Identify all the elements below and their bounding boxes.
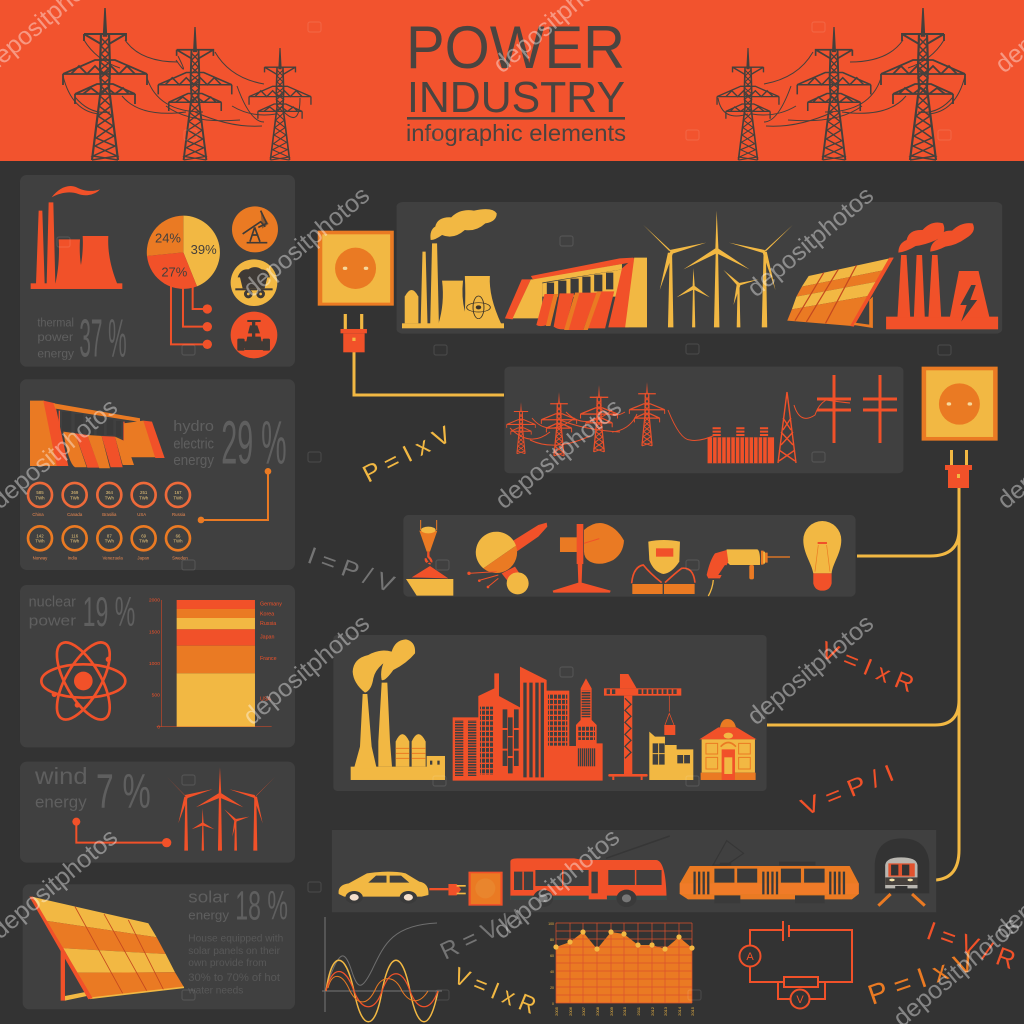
icon: wind turbines xyxy=(643,211,793,327)
label: hydro electric energy: electric xyxy=(173,437,214,453)
ring chart row two xyxy=(28,526,190,560)
label: thermal power energy: power xyxy=(37,330,73,344)
icon: nuclear plant xyxy=(402,209,504,328)
panel: hydro electric xyxy=(20,379,295,570)
connector xyxy=(198,468,271,523)
ring chart row one: 585 xyxy=(36,490,44,495)
label: thermal power energy xyxy=(37,316,74,361)
pie chart: 39% xyxy=(191,242,217,257)
icon: coal cart xyxy=(231,259,277,306)
solar description: solar panels on their xyxy=(188,946,281,957)
ring chart row one: 364 xyxy=(106,490,114,495)
label: thermal power energy: energy xyxy=(37,347,74,361)
depositphotos watermark: depositphotos xyxy=(238,609,375,731)
label: hydro electric energy: energy xyxy=(173,453,215,469)
chart: area chart: 0 xyxy=(552,1002,554,1006)
ring chart row one: TWh xyxy=(70,495,80,500)
panel: wind energy xyxy=(20,762,295,863)
chart: area chart: 2012 xyxy=(650,1006,655,1016)
ring chart row two: Norway xyxy=(33,555,48,560)
icon: thermal plant xyxy=(886,222,998,329)
icon: trolleybus xyxy=(510,836,670,907)
label: hydro electric energy xyxy=(173,419,215,469)
depositphotos watermark: depositphotos xyxy=(490,393,627,515)
diagram: circuit: A xyxy=(746,951,754,963)
stacked bar chart: Korea xyxy=(260,611,274,617)
chart: area chart: 2006 xyxy=(568,1006,573,1016)
ring chart row two: TWh xyxy=(105,539,114,544)
stacked bar chart: Russia xyxy=(260,621,276,627)
chart: area chart: 2005 xyxy=(554,1006,559,1016)
label: hydro electric energy: hydro xyxy=(173,419,214,435)
diagram: circuit xyxy=(740,921,852,1008)
icon: skyline xyxy=(453,667,603,781)
ring chart row one: 167 xyxy=(174,490,182,495)
chart: area chart: 2011 xyxy=(636,1006,641,1016)
label: solar energy: energy xyxy=(188,908,230,922)
ring chart row two: TWh xyxy=(173,539,183,544)
icon: crane hook with load xyxy=(406,520,453,596)
formula: P = I x V yellow: P = I x V xyxy=(358,421,455,488)
label: solar energy: solar xyxy=(188,888,229,907)
panel: hydro electric: 29 % xyxy=(221,408,287,477)
depositphotos watermark: depositphotos xyxy=(742,609,879,731)
ring chart row one: 369 xyxy=(71,490,79,495)
chart: area chart: 2008 xyxy=(595,1006,600,1016)
solar description: House equipped with xyxy=(188,934,283,945)
icon: atom xyxy=(41,635,125,727)
stacked bar chart: USA xyxy=(260,697,271,703)
ring chart row one: Canada xyxy=(67,512,83,517)
icon: transformer xyxy=(708,427,774,463)
stacked bar chart: 1000 xyxy=(149,661,160,667)
subtitle: infographic elements xyxy=(406,120,626,146)
title: INDUSTRY: INDUSTRY xyxy=(407,73,625,122)
socket one xyxy=(318,231,394,306)
ring chart row one: USA xyxy=(137,512,146,517)
chart: area chart: 2013 xyxy=(663,1006,668,1016)
pylons right xyxy=(717,8,965,160)
ring chart row two: 87 xyxy=(107,533,112,538)
icon: building under construction xyxy=(649,732,693,780)
ring chart row two: 66 xyxy=(176,533,181,538)
stacked bar chart xyxy=(149,598,282,730)
diagram: circuit: V xyxy=(796,994,804,1006)
ring chart row one xyxy=(28,483,190,517)
icon: dam xyxy=(30,401,165,468)
value: 18 %: 18 % xyxy=(235,882,288,928)
label: solar energy xyxy=(188,888,230,922)
chart: area chart: 80 xyxy=(550,938,554,942)
icon: light bulb xyxy=(803,521,841,591)
stacked bar chart: 500 xyxy=(152,693,160,699)
formula: V = P / I orange: V = P / I xyxy=(797,760,898,822)
ring chart row one: Russia xyxy=(172,512,186,517)
stacked bar chart: Germany xyxy=(260,602,282,608)
depositphotos watermark: depositphotos xyxy=(488,823,625,945)
ring chart row one: TWh xyxy=(105,495,114,500)
chart: area chart: 2014 xyxy=(677,1006,682,1016)
ring chart row two: Japan xyxy=(137,555,150,560)
panel: thermal power: 37 % xyxy=(79,310,127,369)
ring chart row two: Venezuela xyxy=(103,555,123,560)
header band xyxy=(0,0,1024,161)
pie connectors xyxy=(171,283,212,349)
label: nuclear power: nuclear xyxy=(29,595,76,611)
depositphotos watermark: depositphotos xyxy=(238,181,375,303)
connecting yellow wires xyxy=(354,352,959,880)
ring chart row one: TWh xyxy=(35,495,45,500)
chart: area chart: 60 xyxy=(550,954,554,958)
label: wind energy: energy xyxy=(35,792,87,811)
chart: area chart: 20 xyxy=(550,986,554,990)
panel: transport xyxy=(332,830,936,912)
label: wind energy xyxy=(34,763,88,811)
ring chart row two: India xyxy=(68,555,78,560)
panel: solar energy xyxy=(23,882,295,1009)
chart: area chart: 40 xyxy=(550,970,554,974)
icon: gas valve xyxy=(231,312,277,358)
icon: tram xyxy=(680,841,859,903)
formula: I = P / V gray: I = P / V xyxy=(304,542,398,598)
icon: transmission towers xyxy=(507,382,715,456)
chart: area chart: 2009 xyxy=(609,1006,614,1016)
connector xyxy=(72,818,171,847)
icon: tower crane xyxy=(604,674,681,780)
pie chart: 24% xyxy=(155,230,181,245)
icon: welder xyxy=(632,540,695,594)
chart: sine waves xyxy=(322,917,442,1022)
socket two xyxy=(922,367,998,441)
icon: thermal plant xyxy=(31,186,122,289)
panel: thermal power xyxy=(20,175,295,369)
icon: solar panel xyxy=(29,897,184,1001)
icon: city factory xyxy=(351,639,445,780)
ring chart row one: 251 xyxy=(140,490,148,495)
pie chart: 27% xyxy=(161,264,188,279)
label: nuclear power: power xyxy=(29,614,76,630)
chart: area chart: 100 xyxy=(548,922,554,926)
icon: fan lamp xyxy=(553,523,624,593)
icon: lattice mast and poles xyxy=(778,375,897,463)
panel: city xyxy=(333,635,767,791)
label: thermal power energy: thermal xyxy=(37,316,74,330)
ring chart row one: Brasilia xyxy=(102,512,117,517)
formula: R = V / I gray: R = V / I xyxy=(436,904,527,965)
formula: V = I x R yellow: V = I x R xyxy=(450,963,540,1020)
ring chart row two: TWh xyxy=(70,539,80,544)
solar description: 30% to 70% of hot xyxy=(188,972,280,984)
stacked bar chart: 0 xyxy=(157,724,160,730)
panel: power grid xyxy=(504,367,903,473)
solar description xyxy=(187,934,283,996)
panel: energy sources xyxy=(397,202,1002,334)
plug one xyxy=(341,314,367,352)
ring chart row two: Sweden xyxy=(172,555,188,560)
value: 19 %: 19 % xyxy=(83,588,135,635)
panel: nuclear power xyxy=(20,585,295,747)
formula: P = I x V orange: P = I x V xyxy=(864,945,978,1011)
pie chart xyxy=(147,216,220,289)
icon: drill xyxy=(707,549,790,596)
panel: industry xyxy=(403,515,856,597)
formula: I = V / R red: I = V / R xyxy=(923,915,1020,975)
chart: area chart xyxy=(548,922,695,1016)
stacked bar chart: France xyxy=(260,656,277,662)
ring chart row two: TWh xyxy=(139,539,149,544)
stacked bar chart: 2000 xyxy=(149,598,160,604)
stacked bar chart: 1500 xyxy=(149,629,160,635)
chart: area chart: 2015 xyxy=(690,1006,695,1016)
ring chart row two: 69 xyxy=(141,533,147,538)
chart: area chart: 2007 xyxy=(581,1006,586,1016)
pylons left xyxy=(63,8,311,160)
icon: grinder xyxy=(467,523,547,594)
title underline xyxy=(407,117,625,120)
formula: V = I x R red: V = I x R xyxy=(817,637,918,698)
icon: car charging socket xyxy=(468,872,503,906)
icon: wind turbines xyxy=(167,767,275,851)
icon: car plug xyxy=(429,884,466,895)
icon: hydro dam xyxy=(505,258,647,330)
ring chart row one: TWh xyxy=(139,495,149,500)
icon: oil pump xyxy=(232,206,278,252)
chart: area chart: 2010 xyxy=(622,1006,627,1016)
title: POWER: POWER xyxy=(406,14,625,81)
depositphotos watermark: depositphotos xyxy=(742,181,879,303)
icon: car xyxy=(339,872,428,904)
solar description: water needs xyxy=(187,985,243,996)
ring chart row two: 142 xyxy=(36,533,44,538)
icon: train in tunnel xyxy=(875,838,929,906)
value: 7 %: 7 % xyxy=(96,764,151,818)
ring chart row two: TWh xyxy=(35,539,45,544)
plug two xyxy=(945,450,972,488)
label: wind energy: wind xyxy=(34,763,88,789)
label: nuclear power xyxy=(29,595,76,630)
icon: house xyxy=(699,719,757,780)
ring chart row one: TWh xyxy=(173,495,183,500)
ring chart row two: 116 xyxy=(71,533,79,538)
stacked bar chart: Japan xyxy=(260,634,275,640)
ring chart row one: China xyxy=(32,512,44,517)
icon: solar panel xyxy=(787,258,894,328)
solar description: own provide from xyxy=(188,958,267,969)
